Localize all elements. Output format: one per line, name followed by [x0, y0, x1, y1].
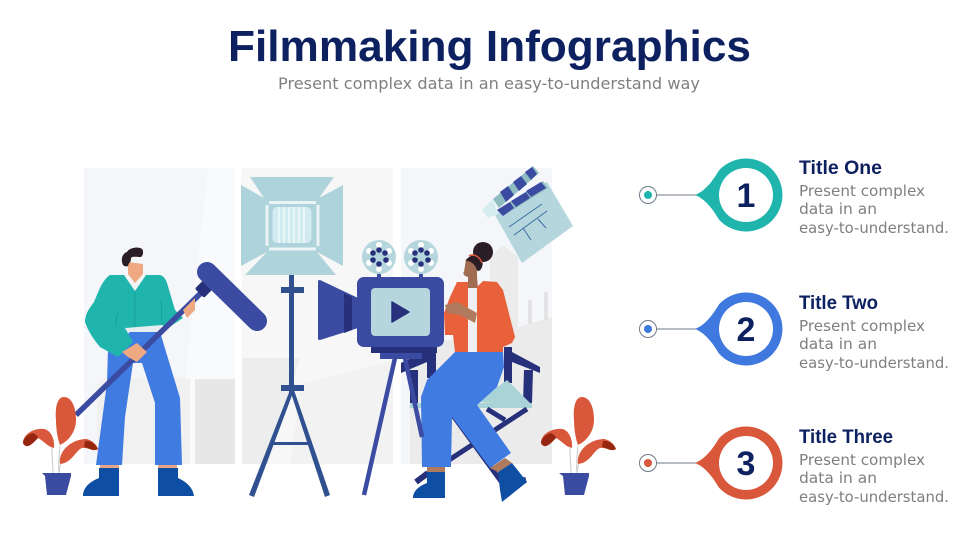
- camera body: [357, 277, 444, 347]
- play icon: [392, 302, 409, 322]
- subtitle: Present complex data in an easy-to-understand way: [278, 74, 700, 93]
- clapperboard: [482, 166, 573, 263]
- white shirt: [468, 288, 477, 353]
- boots: [83, 468, 119, 496]
- item two: data in an: [799, 335, 877, 353]
- face and neck: [463, 259, 478, 288]
- director chair: [401, 347, 540, 485]
- item two: 2: [737, 311, 755, 349]
- ankles: [427, 467, 445, 472]
- pin: [695, 158, 782, 231]
- body: Present complex: [799, 182, 925, 200]
- neck and face: [125, 262, 143, 291]
- number: 1: [737, 177, 755, 215]
- item two: Present complex: [799, 317, 925, 335]
- item one: easy-to-understand.: [799, 219, 949, 237]
- man holding boom microphone: [76, 248, 257, 496]
- hands: [445, 302, 477, 323]
- item three: Present complex: [799, 451, 925, 469]
- hands: [183, 298, 195, 318]
- title: Filmmaking Infographics: [228, 22, 751, 71]
- softbox light on tripod: [241, 177, 343, 497]
- boom pole: [76, 292, 202, 415]
- trousers: [421, 352, 511, 468]
- marker dot: [640, 186, 656, 204]
- film camera on tripod: [318, 240, 444, 495]
- item three: [640, 426, 949, 506]
- heading: Title One: [799, 158, 882, 179]
- item one: data in an: [799, 200, 877, 218]
- item two: [640, 292, 949, 372]
- item two: easy-to-understand.: [799, 354, 949, 372]
- shirt: [85, 275, 183, 357]
- item three: data in an: [799, 469, 877, 487]
- item one: [640, 158, 949, 237]
- jacket: [444, 282, 468, 352]
- item three: 3: [737, 445, 755, 483]
- left plant: [23, 397, 98, 495]
- item three: Title Three: [799, 427, 893, 448]
- tripod stand: [249, 275, 330, 497]
- item two: Title Two: [799, 293, 878, 314]
- background panels: [84, 168, 552, 464]
- hair bun: [473, 242, 493, 262]
- woman seated: [413, 242, 527, 502]
- microphone: [195, 280, 213, 298]
- hair: [122, 248, 143, 266]
- right plant: [541, 397, 616, 495]
- waistband: [124, 325, 162, 332]
- hair: [466, 256, 483, 271]
- item three: easy-to-understand.: [799, 488, 949, 506]
- tripod legs: [364, 358, 422, 495]
- boots: [413, 472, 445, 498]
- film reels: [362, 240, 438, 278]
- lens: [318, 280, 358, 340]
- trousers: [96, 332, 182, 465]
